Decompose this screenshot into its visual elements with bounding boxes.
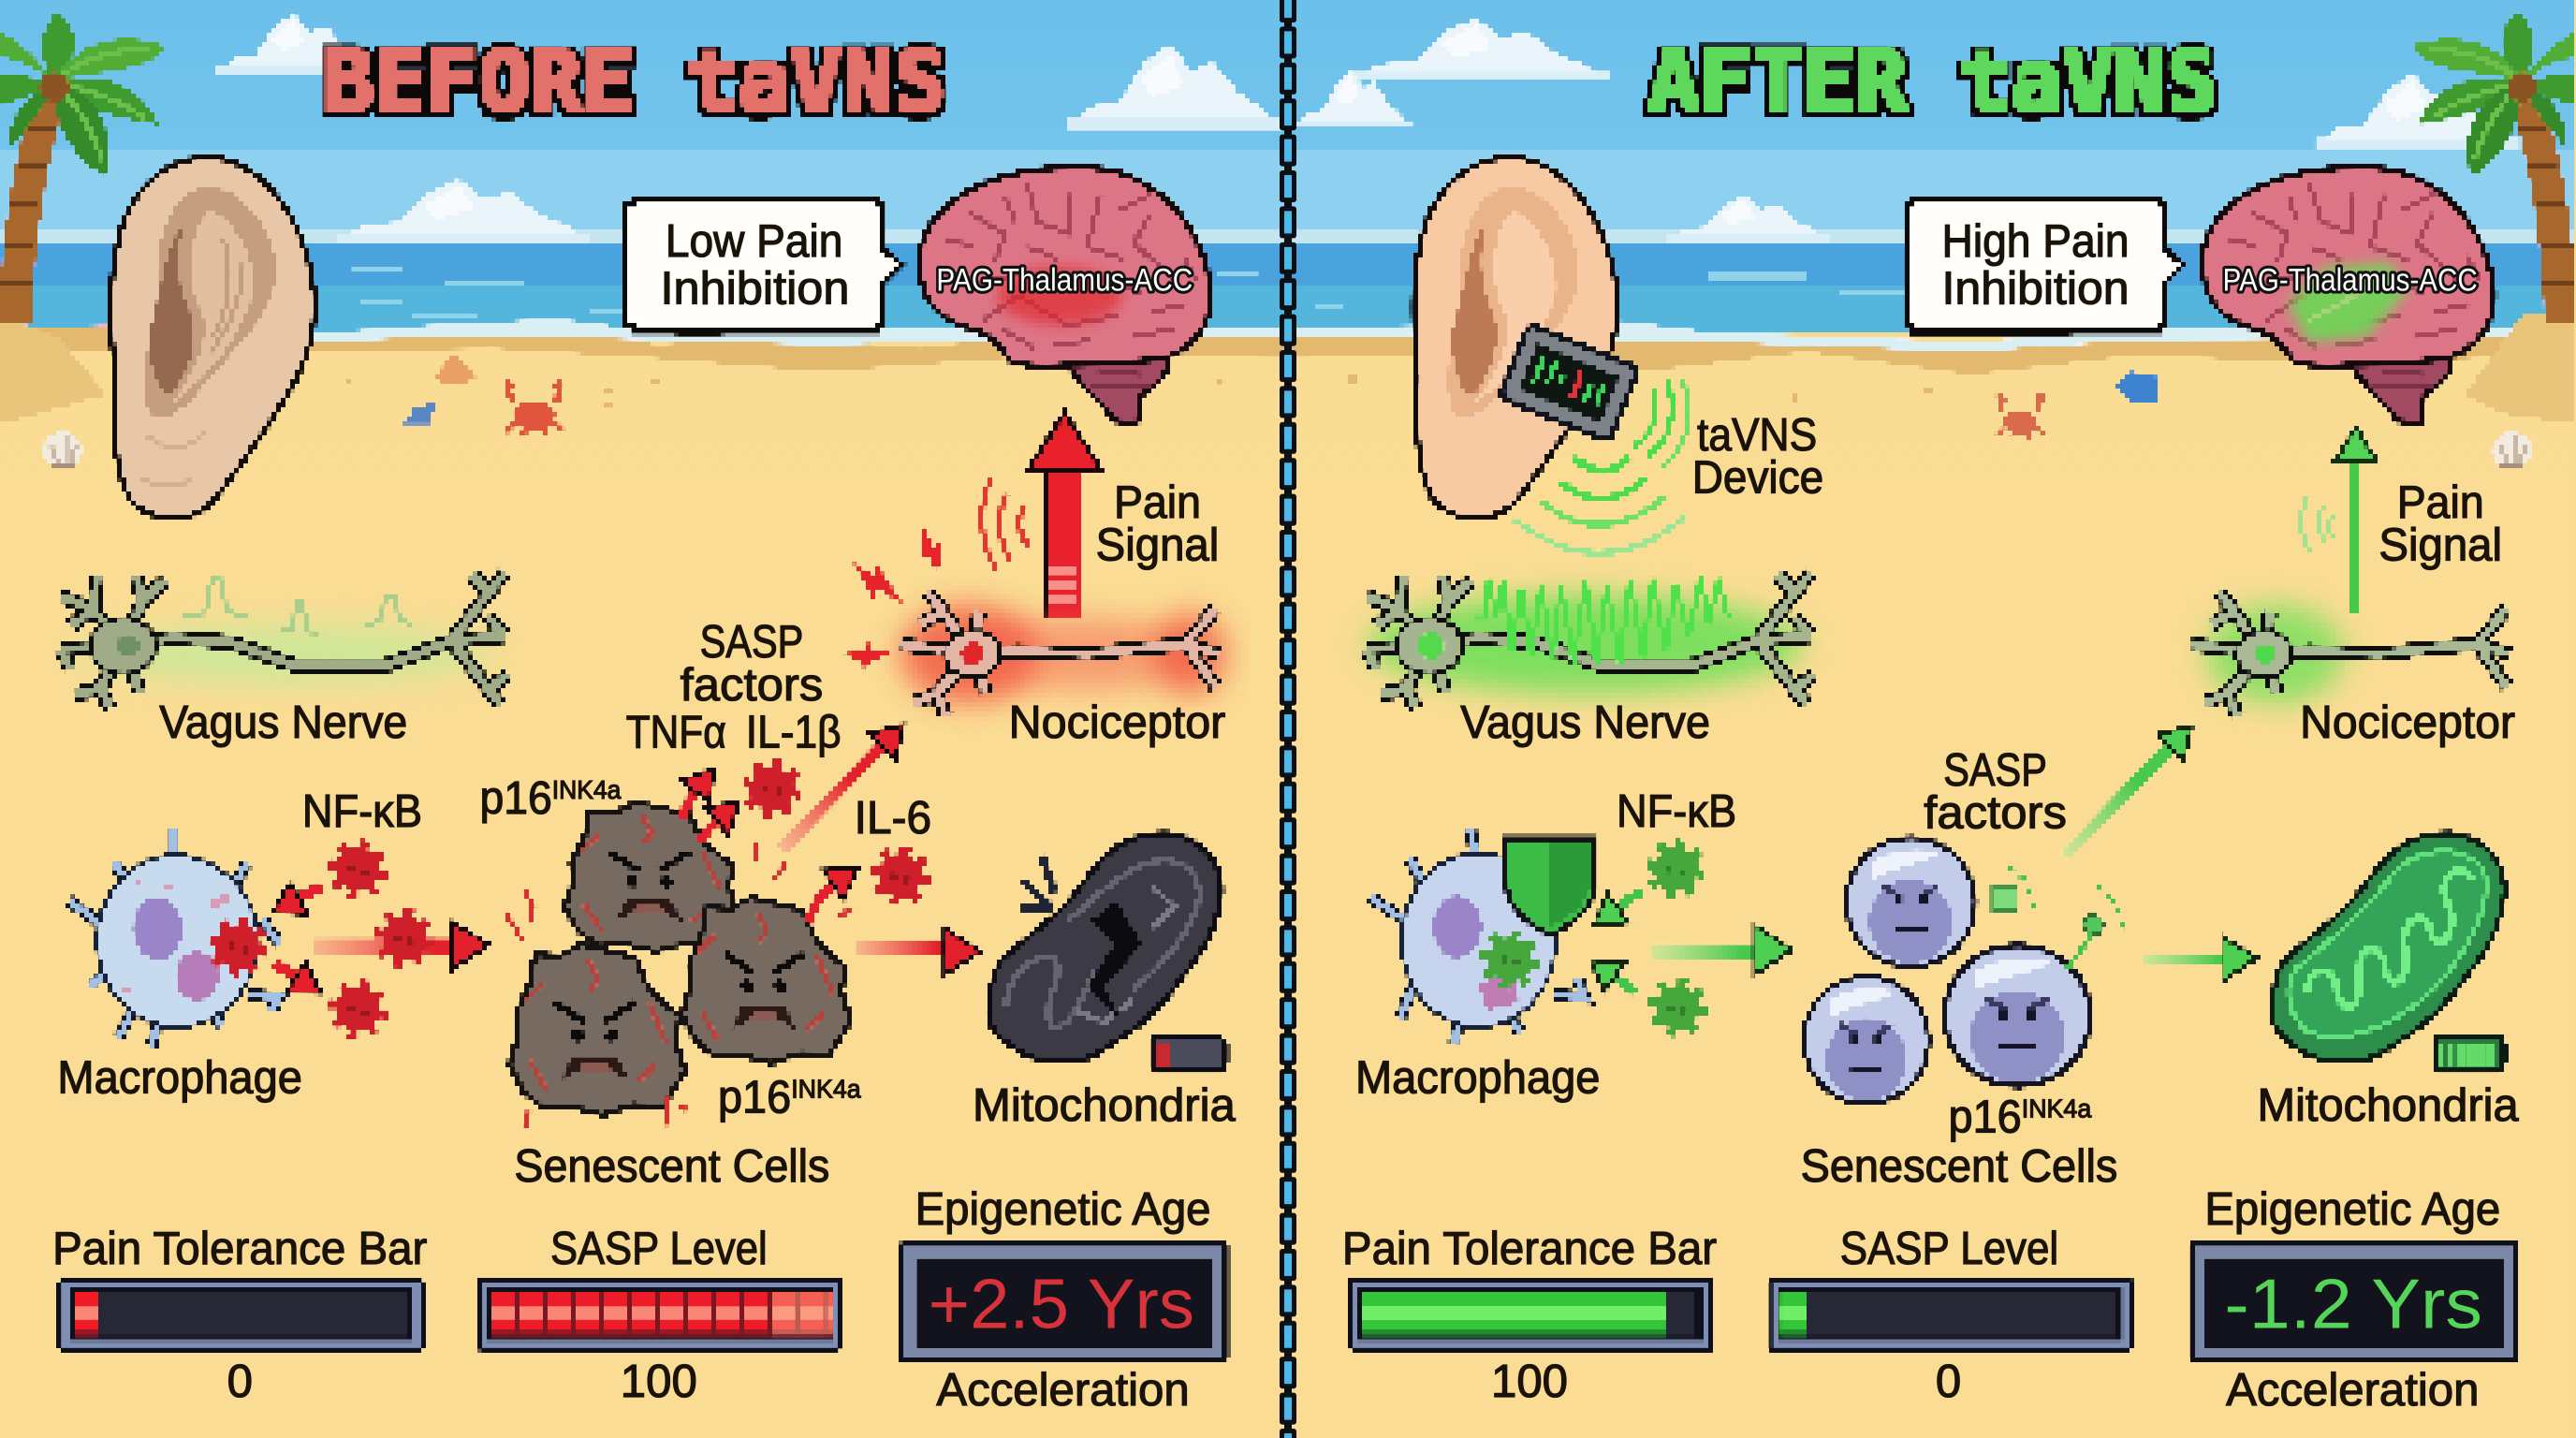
damaged mitochondria [988,833,1229,1072]
brain after [2203,168,2495,424]
title: before taVNS: BEFORE taVNS [322,34,946,131]
speech bubble before [626,200,902,332]
senescent cells before [509,802,851,1115]
macrophage before [69,829,279,1047]
label: nociceptor before: Nociceptor [1009,697,1225,748]
label: vagus nerve after: Vagus Nerve [1460,697,1710,748]
nociceptor before [900,592,1227,716]
label: mitochondria before: Mitochondria [973,1080,1237,1131]
label: macrophage after: Macrophage [1355,1052,1600,1103]
label: p16 top before: INK4a [552,775,622,804]
label: SASP factors after: factors [1924,788,2067,839]
palm tree right [2411,11,2576,322]
label: p16 bottom before: INK4a [791,1075,861,1104]
label: pain tolerance after: Pain Tolerance Bar [1342,1224,1717,1274]
value: SASP after: 0 [1936,1357,1961,1407]
taVNS device [1500,324,1638,442]
arrow: macrophage to senescent cells [312,913,490,970]
arrow: strong pain signal [1027,413,1103,618]
label: senescent cells before: Senescent Cells [514,1141,829,1192]
label: IL-6: IL-6 [855,793,931,844]
label: low pain inhibition: Inhibition [661,264,849,315]
palm tree left [0,11,165,322]
pain tolerance bar after [1348,1278,1714,1351]
SASP level bar before [476,1278,842,1351]
sparks around cells [506,842,855,1127]
label: pain signal before: Signal [1096,521,1219,571]
label: high pain inhibition: Inhibition [1942,264,2130,315]
arrow: senescent cells to nociceptor [781,744,884,850]
small SASP particles after [1993,868,2126,970]
label: taVNS device: taVNS [1697,410,1817,461]
label: NF-kB before: NF-κB [302,786,422,837]
label: p16 bottom before: p16 [718,1072,795,1123]
value: epigenetic acceleration before: +2.5 Yrs [929,1264,1194,1343]
label: NF-kB after: NF-κB [1617,786,1736,837]
label: macrophage before: Macrophage [57,1052,302,1103]
healthy mitochondria [2272,833,2509,1072]
label: pain tolerance before: Pain Tolerance Bar [52,1224,427,1274]
value: epigenetic acceleration after: -1.2 Yrs [2224,1264,2482,1343]
label: p16 after: INK4a [2022,1094,2092,1123]
pain tolerance bar before [58,1278,424,1351]
label: brain region after: PAG-Thalamus-ACC [2223,263,2478,299]
arrow: cells to mitochondria after [2143,937,2258,981]
arrows around macrophage before [274,886,322,977]
arrow: senescent cells to mitochondria [855,929,981,975]
vagus nerve after [1367,574,1814,709]
nociceptor after [2191,592,2510,716]
arrows around macrophage after [1614,890,1641,992]
center divider chain [1280,0,1296,1438]
label: brain region before: PAG-Thalamus-ACC [936,263,1193,299]
lightning bolts before [838,527,943,674]
label: acceleration before: Acceleration [936,1365,1190,1416]
beach creatures and shells [43,352,2532,468]
label: epigenetic age after: Epigenetic Age [2204,1184,2500,1235]
label: TNF alpha and IL-1 beta: TNFα [626,708,726,758]
label: taVNS device: Device [1692,453,1823,504]
label: vagus nerve before: Vagus Nerve [159,697,407,748]
pain waves after [2301,496,2333,550]
label: SASP factors before: factors [681,660,823,711]
value: pain tolerance before: 0 [227,1357,253,1407]
full battery [2435,1037,2509,1072]
shield [1505,838,1595,935]
arrows from senescent cells [681,790,835,924]
text labels layer [52,216,2519,1416]
label: SASP factors before: SASP [700,617,803,668]
value: pain tolerance after: 100 [1491,1357,1568,1407]
device signal waves [1515,378,1689,553]
label: p16 top before: p16 [479,773,556,824]
label: nociceptor after: Nociceptor [2300,697,2515,748]
NF-kB particles before [332,844,384,1034]
clouds [217,13,2520,242]
label: low pain inhibition: Low Pain [666,216,842,267]
label: mitochondria after: Mitochondria [2258,1080,2519,1131]
speech bubble after [1906,200,2184,332]
label: senescent cells after: Senescent Cells [1801,1141,2117,1192]
label: SASP level after: SASP Level [1840,1224,2058,1274]
pain waves before [982,477,1029,572]
label: high pain inhibition: High Pain [1942,216,2130,267]
label: acceleration after: Acceleration [2226,1365,2479,1416]
label: epigenetic age before: Epigenetic Age [915,1184,1211,1235]
title: after taVNS: AFTER taVNS [1647,34,2217,131]
ear before [110,157,315,519]
arrow: macrophage to cells after [1653,925,1793,975]
label: pain signal before: Pain [1114,477,1201,528]
label: TNF alpha and IL-1 beta: IL-1β [746,708,842,758]
arrow: cells to nociceptor after [2063,746,2172,857]
label: SASP factors after: SASP [1943,745,2047,796]
value: SASP before: 100 [621,1357,697,1407]
brain before [919,168,1211,424]
arrow: weak pain signal [2334,427,2378,611]
ear after with device [1413,157,1638,519]
NF-kB particles after [1650,844,1703,1033]
label: SASP level before: SASP Level [550,1224,768,1274]
epigenetic display before [899,1240,1229,1364]
vagus nerve before [61,574,507,709]
label: pain signal after: Pain [2397,477,2484,528]
label: pain signal after: Signal [2378,521,2502,571]
label: p16 after: p16 [1949,1092,2026,1142]
SASP level bar after [1767,1278,2133,1351]
macrophage after [1370,829,1595,1045]
calm senescent cells after [1804,838,2090,1104]
low battery [1151,1037,1229,1072]
cytokine particles [747,763,926,902]
epigenetic display after [2188,1240,2519,1364]
